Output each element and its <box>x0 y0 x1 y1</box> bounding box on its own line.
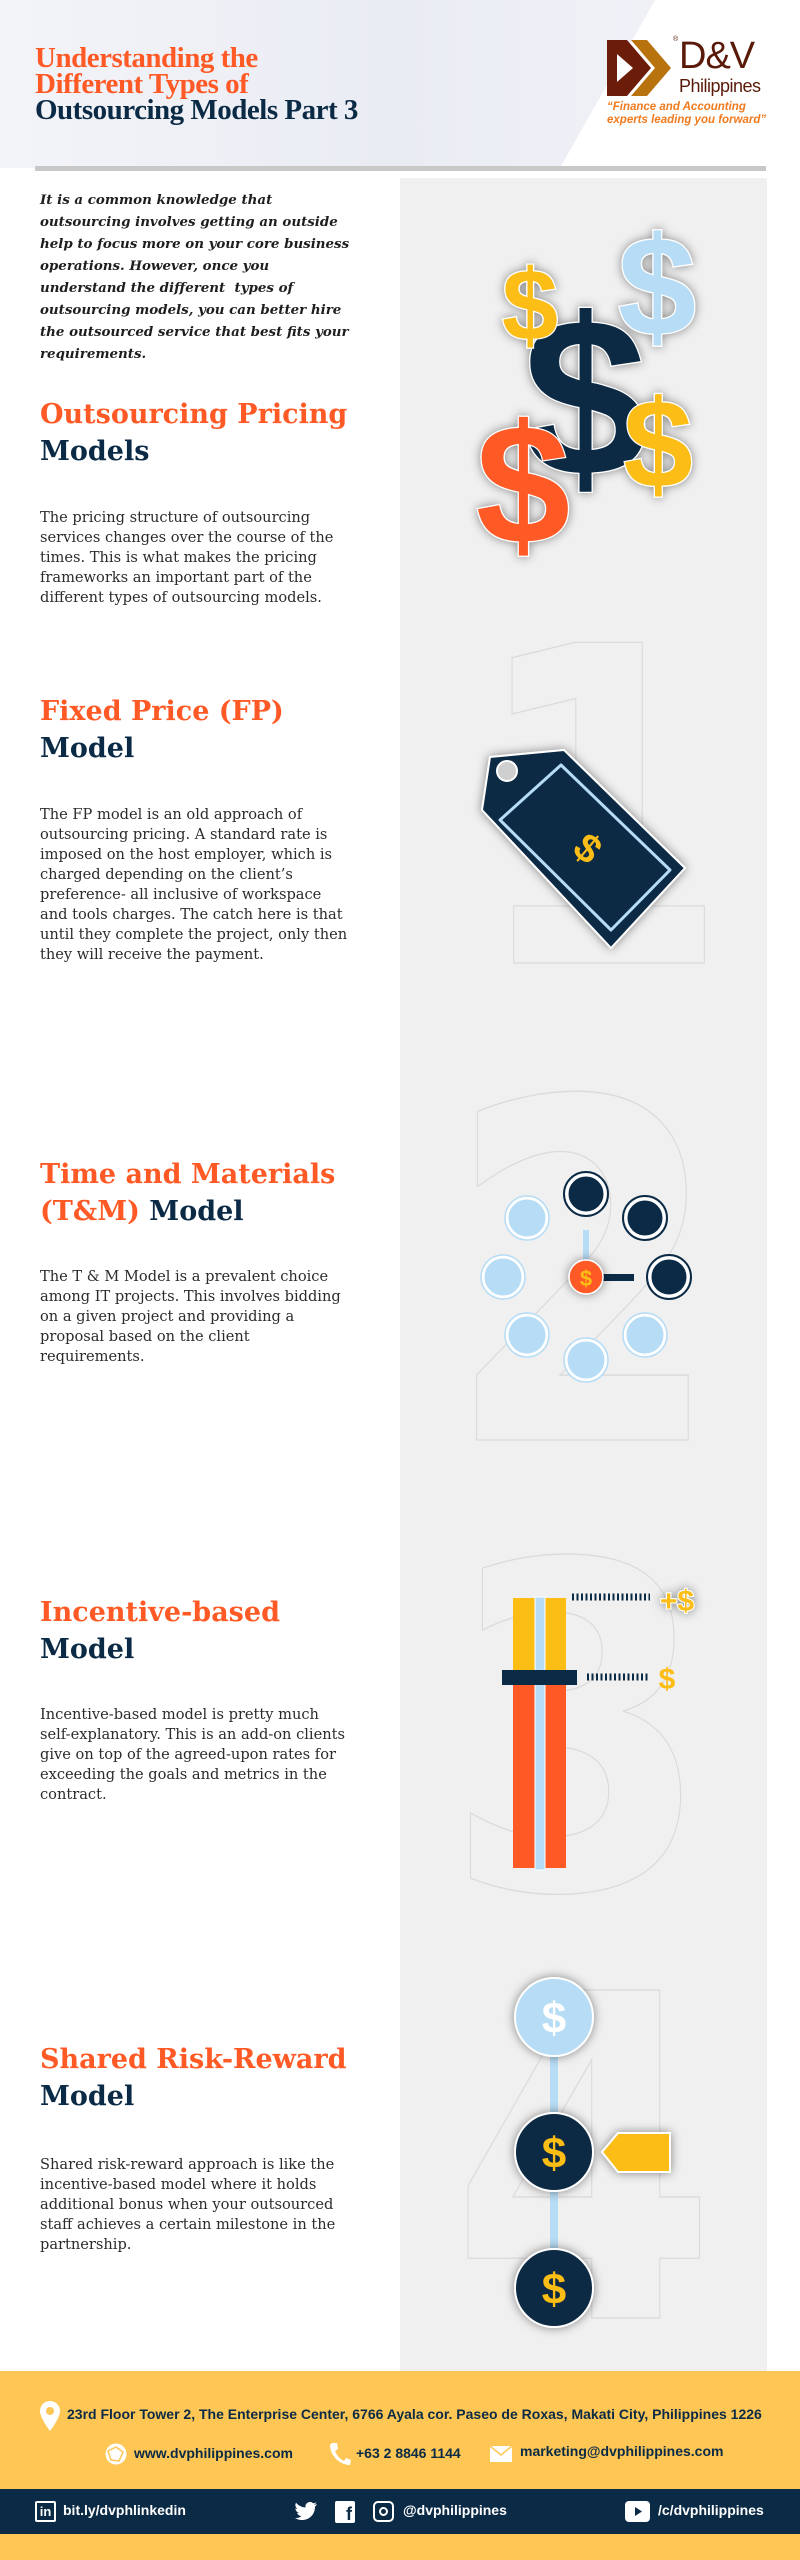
text: incentive <box>40 1706 345 1803</box>
text: incentive: contract. <box>40 1786 107 1803</box>
icon: dollar signs cluster: $ <box>522 271 648 523</box>
text: incentive: self-explanatory. This is an add-on clients <box>40 1726 345 1743</box>
heading: Fixed Price <box>40 696 284 764</box>
title: Different Types of <box>35 68 248 100</box>
intro text: outsourcing models, you can better hire <box>40 302 341 318</box>
text: incentive: exceeding the goals and metrics in the <box>40 1766 327 1783</box>
text: fixed price: until they complete the project, only then <box>40 926 347 943</box>
heading: Time and Materials <box>40 1159 335 1227</box>
header background <box>0 0 655 168</box>
heading: Fixed Price: Fixed Price (FP) <box>40 696 284 727</box>
footer: contact info: www.dvphilippines.com <box>134 2445 293 2461</box>
text: T&M: requirements. <box>40 1348 145 1365</box>
text: T&M: on a given project and providing a <box>40 1308 294 1325</box>
footer: social bar: bit.ly/dvphlinkedin <box>63 2502 186 2518</box>
heading: Incentive-based <box>40 1597 280 1665</box>
icon: shared risk-reward milestones: $ <box>542 2265 566 2314</box>
text: fixed price: preference- all inclusive of workspace <box>40 886 321 903</box>
icon: circle network (T&M) <box>481 1172 691 1382</box>
text: shared risk-reward: partnership. <box>40 2236 131 2253</box>
intro text: help to focus more on your core business <box>40 236 349 252</box>
title: Outsourcing Models Part 3 <box>35 94 358 126</box>
icon: facebook <box>335 2501 355 2523</box>
icon: dollar signs cluster: $ <box>476 390 570 580</box>
heading: Fixed Price: Model <box>40 733 134 764</box>
heading: Outsourcing Pricing Models: Outsourcing Pricing <box>40 399 347 430</box>
icon: dollar signs cluster <box>476 207 696 580</box>
heading: Incentive-based: Incentive-based <box>40 1597 280 1628</box>
intro text: It is a common knowledge that <box>40 192 272 208</box>
text: T&M: proposal based on the client <box>40 1328 250 1345</box>
text: shared risk-reward <box>40 2156 335 2253</box>
text: fixed price: outsourcing pricing. A standard rate is <box>40 826 327 843</box>
text: T&M: The T & M Model is a prevalent choice <box>40 1268 328 1285</box>
big faint numbers: 2 <box>445 1004 723 1551</box>
title <box>35 42 358 126</box>
text: fixed price: and tools charges. The catch here is that <box>40 906 343 923</box>
big faint numbers <box>445 556 730 2425</box>
icon: instagram <box>373 2501 394 2522</box>
logo: D&V Philippines: ® <box>673 36 678 43</box>
intro text: operations. However, once you <box>40 258 269 274</box>
icon: dollar signs cluster: $ <box>502 250 558 362</box>
icon: youtube <box>625 2501 650 2522</box>
icon: facebook: f <box>346 2504 352 2524</box>
text: pricing models <box>40 509 333 606</box>
text: pricing models: services changes over the course of the <box>40 529 333 546</box>
icon: shared risk-reward milestones: $ <box>542 2129 566 2178</box>
divider <box>35 166 766 171</box>
icon: twitter <box>295 2502 317 2520</box>
text: pricing models: frameworks an important part of the <box>40 569 312 586</box>
footer: contact info <box>0 2371 800 2560</box>
text: shared risk-reward: staff achieves a certain milestone in the <box>40 2216 335 2233</box>
icon: linkedin <box>35 2501 56 2522</box>
heading: Time and Materials: (T&M) Model <box>40 1196 244 1227</box>
footer: social bar: /c/dvphilippines <box>658 2502 764 2518</box>
heading: Time and Materials: Time and Materials <box>40 1159 335 1190</box>
icon: shared risk-reward milestones <box>515 1978 670 2327</box>
big faint numbers: 3 <box>445 1471 711 1995</box>
icon: dollar signs cluster: $ <box>618 207 696 365</box>
icon: logo triangles <box>607 40 671 96</box>
title: Understanding the <box>35 42 258 74</box>
text: shared risk-reward: incentive-based model where it holds <box>40 2176 316 2193</box>
icon: mail <box>490 2446 512 2462</box>
icon: globe <box>106 2444 126 2464</box>
text: T&M <box>40 1268 341 1365</box>
text: fixed price: they will receive the payment. <box>40 946 264 963</box>
logo: D&V Philippines: “Finance and Accounting <box>607 101 746 113</box>
logo: D&V Philippines: Philippines <box>679 76 761 96</box>
text: T&M: among IT projects. This involves bidding <box>40 1288 341 1305</box>
heading: Shared Risk-Reward: Shared Risk-Reward <box>40 2044 346 2075</box>
icon: linkedin: in <box>40 2504 51 2519</box>
text: shared risk-reward: additional bonus when your outsourced <box>40 2196 333 2213</box>
intro text: understand the different types of <box>40 280 293 296</box>
intro text <box>40 192 350 362</box>
text: pricing models: The pricing structure of outsourcing <box>40 509 310 526</box>
icon: shared risk-reward milestones: $ <box>542 1994 566 2043</box>
right graphic panel background <box>400 178 767 2371</box>
big faint numbers: 1 <box>470 556 730 1068</box>
icon: phone <box>330 2443 351 2465</box>
text: shared risk-reward: Shared risk-reward approach is like the <box>40 2156 334 2173</box>
icon: location pin <box>40 2401 60 2431</box>
heading: Outsourcing Pricing Models <box>40 399 347 467</box>
icon: incentive bars: +$ <box>660 1585 694 1618</box>
footer: contact info: marketing@dvphilippines.com <box>520 2443 723 2459</box>
text: pricing models: times. This is what makes the pricing <box>40 549 317 566</box>
text: incentive: Incentive-based model is pretty much <box>40 1706 319 1723</box>
footer: social bar <box>0 2489 800 2534</box>
footer: contact info: 23rd Floor Tower 2, The Enterprise Center, 6766 Ayala cor. Paseo de Roxas, Makati City, Philippines 1226 <box>67 2406 762 2422</box>
icon: dollar signs cluster: $ <box>623 375 693 514</box>
text: fixed price: imposed on the host employer, which is <box>40 846 332 863</box>
heading: Shared Risk-Reward: Model <box>40 2081 134 2112</box>
icon: price tag <box>482 750 685 948</box>
icon: incentive bars: $ <box>659 1663 676 1696</box>
intro text: the outsourced service that best fits your <box>40 324 349 340</box>
footer: contact info: +63 2 8846 1144 <box>356 2445 461 2461</box>
heading: Outsourcing Pricing Models: Models <box>40 436 149 467</box>
text: incentive: give on top of the agreed-upon rates for <box>40 1746 336 1763</box>
text: pricing models: different types of outsourcing models. <box>40 589 322 606</box>
icon: circle network (T&M): $ <box>580 1266 592 1291</box>
intro text: requirements. <box>40 346 146 362</box>
logo: D&V Philippines <box>607 35 766 126</box>
heading: Incentive-based: Model <box>40 1634 134 1665</box>
icon: price tag: $ <box>565 825 610 873</box>
heading: Shared Risk-Reward <box>40 2044 346 2112</box>
intro text: outsourcing involves getting an outside <box>40 214 338 230</box>
text: fixed price: charged depending on the client’s <box>40 866 293 883</box>
footer: social bar: @dvphilippines <box>403 2502 507 2518</box>
icon: incentive bars <box>502 1585 694 1870</box>
logo: D&V Philippines: D&V <box>679 35 754 77</box>
text: fixed price: The FP model is an old approach of <box>40 806 302 823</box>
text: fixed price <box>40 806 347 963</box>
logo: D&V Philippines: experts leading you forward” <box>607 114 766 126</box>
